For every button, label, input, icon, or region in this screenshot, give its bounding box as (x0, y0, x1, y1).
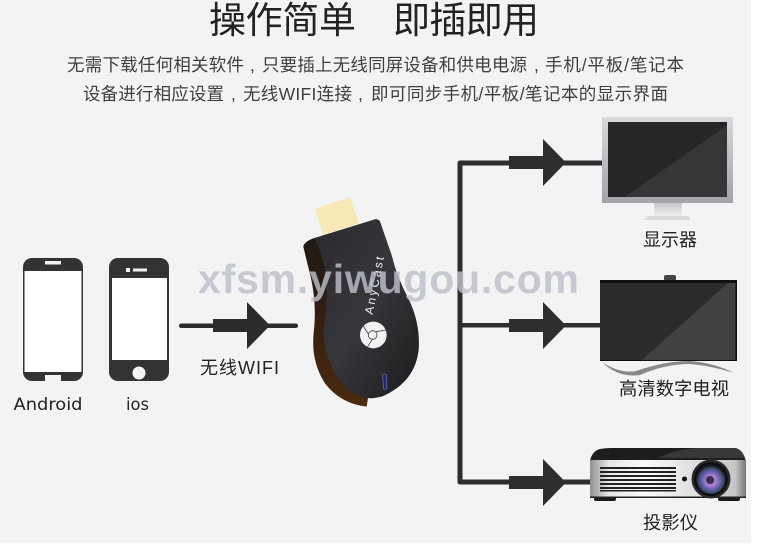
title: 即插即用 (393, 0, 539, 41)
description text: , (250, 55, 255, 75)
dongle black body (314, 219, 419, 398)
description text: 手机/平板/笔记本 (545, 55, 684, 75)
watermark: xfsm.yiwugou.com (198, 256, 579, 302)
icon: ios phone (109, 258, 169, 381)
arrow: to projector (509, 459, 566, 506)
description text: , (231, 84, 236, 104)
icon: android phone (23, 258, 83, 381)
arrow: to tv (509, 302, 566, 349)
icon: monitor (602, 117, 733, 220)
vent slots (600, 467, 676, 492)
description text: , (534, 55, 539, 75)
arrow: to monitor (509, 139, 566, 186)
description text: 无需下载任何相关软件 (67, 55, 244, 75)
description text: 即可同步手机/平板/笔记本的显示界面 (371, 84, 668, 104)
connector tree (460, 139, 602, 506)
title: 操作简单 (209, 0, 356, 41)
label: android: Android (14, 395, 82, 415)
logo (360, 322, 387, 348)
title (209, 0, 539, 41)
led indicator (383, 374, 387, 389)
description text: , (358, 84, 363, 104)
label: monitor: 显示器 (643, 230, 697, 250)
description text: 设备进行相应设置 (83, 84, 224, 104)
label: projector: 投影仪 (643, 512, 698, 533)
description text: 只要插上无线同屏设备和供电电源 (262, 55, 527, 75)
dongle brown back (303, 219, 390, 407)
icon: tv (600, 275, 737, 375)
label: wireless wifi: 无线WIFI (200, 358, 279, 378)
lens (692, 460, 730, 498)
dongle (303, 197, 419, 407)
icon: projector (590, 448, 746, 501)
brand text: AnyCast (362, 255, 387, 316)
label: ios: ios (126, 395, 149, 415)
description text (67, 55, 684, 104)
description text: 无线WIFI连接 (243, 84, 352, 104)
label: tv: 高清数字电视 (619, 378, 729, 399)
hdmi plug (315, 197, 359, 235)
arrow: phones to dongle (179, 302, 298, 349)
